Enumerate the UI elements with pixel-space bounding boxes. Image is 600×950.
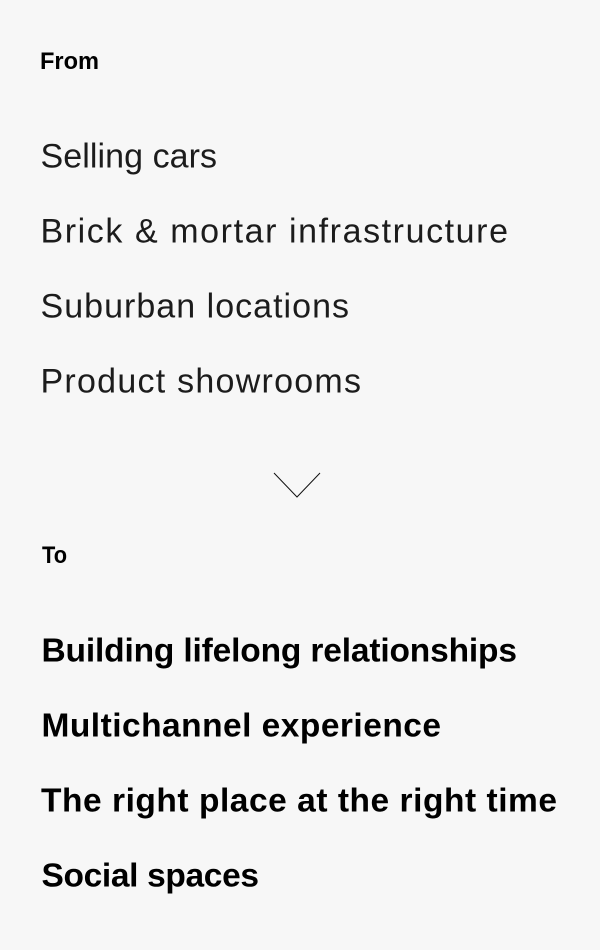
item: product showrooms: Product showrooms [40,362,361,400]
item: selling cars: Selling cars [40,138,217,176]
item: brick and mortar: Brick & mortar infrastructure [40,212,508,250]
panel: to [41,542,557,894]
item: social spaces: Social spaces [42,858,259,894]
heading: To: To [42,542,67,569]
list: to items [41,632,557,894]
item: multichannel experience: Multichannel experience [42,708,441,744]
panel: from [40,48,508,400]
heading: From: From [40,48,99,75]
list: from items [40,138,508,400]
item: building lifelong relationships: Building lifelong relationships [42,632,517,670]
item: suburban locations: Suburban locations [40,288,349,326]
item: the right place: The right place at the right time [41,782,557,820]
arrow: chevron down [274,473,320,497]
